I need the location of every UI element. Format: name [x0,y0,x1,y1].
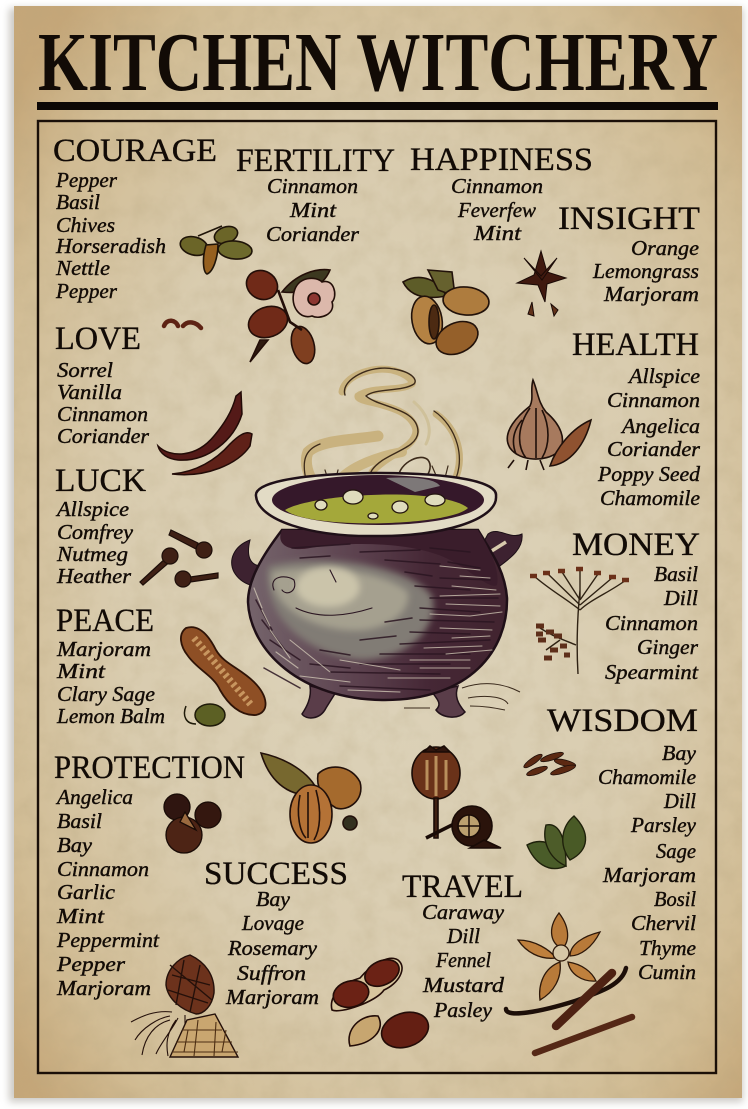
panel: money: Basil [654,562,698,586]
panel: love: Coriander [57,424,150,448]
icon: chillies [158,392,252,475]
title rule [37,102,718,110]
panel: insight: Lemongrass [592,259,699,283]
icon: cauldron steam [304,368,459,490]
icon: poppy seed heads [412,746,501,848]
panel: love: LOVE [55,321,141,357]
panel: protection: Peppermint [56,928,160,952]
panel: wisdom: Chamomile [598,765,696,789]
panel: happiness [410,142,593,245]
panel: travel [402,869,523,1022]
panel: insight: INSIGHT [558,201,700,237]
panel: courage: Horseradish [55,234,166,258]
panel: peace: Marjoram [56,637,151,661]
panel: insight [558,201,700,306]
panel: peace [56,603,165,728]
panel: health: HEALTH [572,327,699,363]
panel: health: Angelica [620,414,700,438]
panel: courage: Basil [56,190,100,214]
panel: travel: TRAVEL [402,869,523,905]
panel: luck: Heather [56,564,132,588]
panel: health: Allspice [627,364,700,388]
icon: cauldron feet [302,686,465,718]
panel: luck: Allspice [55,497,129,521]
icon: dill umbel [530,569,629,674]
cauldron scribble by right foot [404,684,520,710]
panel: money: Dill [663,586,698,610]
panel: travel: Mustard [422,973,505,997]
panel: health: Coriander [607,437,701,461]
panel: protection: Angelica [55,785,133,809]
icon: small beans [164,321,201,328]
panel: luck [55,463,146,588]
cauldron highlight [267,560,433,660]
icon: pine cone and nuts [131,955,238,1057]
panel: insight: Orange [631,236,699,260]
panel: protection: Marjoram [56,976,151,1000]
panel: health: Poppy Seed [597,462,701,486]
panel: courage: Pepper [55,168,118,192]
icon: caraway seeds [522,750,576,778]
panel: wisdom: Marjoram [602,863,696,887]
icon: cloves [140,530,218,587]
cauldron neck shadow [280,530,498,586]
panel: health [572,327,701,510]
panel: happiness: HAPPINESS [410,142,593,178]
panel: money [572,527,700,684]
panel: protection: Basil [57,809,102,833]
panel: wisdom: Sage [656,839,696,863]
panel: success: SUCCESS [204,856,348,892]
panel: fertility [236,143,395,246]
panel: protection: Cinnamon [57,857,149,881]
panel: success: Marjoram [225,985,319,1009]
panel: health: Cinnamon [607,388,700,412]
cauldron rim [256,473,496,536]
panel: luck: Comfrey [57,520,134,544]
panel: travel: Dill [446,924,480,948]
panel: courage: Pepper [55,279,118,303]
panel: love: Cinnamon [57,402,148,426]
panel: fertility: Mint [289,198,337,222]
panel: success: Suffron [237,961,306,985]
icon: garlic [507,380,591,470]
icon: moth seed pods [178,223,253,274]
panel: love [55,321,150,448]
panel: money: Spearmint [605,660,699,684]
panel: health: Chamomile [600,486,700,510]
icon: cauldron handles [232,531,522,587]
panel: wisdom: Dill [663,789,696,813]
panel: courage: COURAGE [53,133,217,169]
icon: hazelnuts [164,794,221,853]
icon: pistachio nuts [403,270,490,361]
panel: courage: Nettle [55,256,110,280]
cauldron hatching [254,544,502,692]
panel: fertility: FERTILITY [236,143,395,179]
panel: money: Cinnamon [605,611,698,635]
panel: wisdom [547,703,698,984]
panel: peace: PEACE [56,603,154,639]
panel: peace: Mint [56,659,106,683]
panel: wisdom: Thyme [639,936,696,960]
panel: money: Ginger [637,635,699,659]
panel: success: Lovage [241,911,304,935]
panel: travel: Pasley [433,998,493,1022]
icon: lemon balm olive [184,704,225,726]
panel: protection: Bay [57,833,93,857]
panel: luck: LUCK [55,463,146,499]
icon: star anise [517,251,566,316]
panel: protection: PROTECTION [54,750,245,786]
icon: vanilla pod and cinnamon sticks [506,968,632,1053]
panel: success [204,856,348,1009]
icon: cauldron [232,368,522,718]
panel: protection: Garlic [57,880,116,904]
panel: wisdom: Bay [662,741,697,765]
panel: happiness: Cinnamon [451,174,543,198]
panel: money: MONEY [572,527,700,563]
icon: nutmeg [261,753,361,843]
panel: protection: Pepper [56,952,126,976]
panel: love: Vanilla [57,380,122,404]
panel: courage [53,133,217,303]
panel: happiness: Feverfew [457,198,536,222]
icon: rosehips and flower [241,265,335,366]
panel: wisdom: Chervil [631,911,696,935]
panel: success: Rosemary [227,936,318,960]
panel: travel: Caraway [422,900,505,924]
panel: happiness: Mint [473,221,522,245]
icon: sage leaves [527,816,586,869]
panel: luck: Nutmeg [56,542,128,566]
icon: peanut halves [330,955,433,1054]
panel: fertility: Cinnamon [267,174,358,198]
panel: peace: Clary Sage [57,682,155,706]
panel: success: Bay [256,887,291,911]
cauldron soup [285,495,468,523]
panel: travel: Fennel [435,948,491,972]
panel: insight: Marjoram [603,282,699,306]
panel: protection [54,750,245,1000]
cauldron body [248,530,507,700]
icon: peanut [181,627,266,715]
panel: wisdom: WISDOM [547,703,698,739]
panel: peace: Lemon Balm [56,704,165,728]
frame [38,121,716,1073]
panel: courage: Chives [56,213,115,237]
panel: wisdom: Parsley [630,813,697,837]
panel: love: Sorrel [57,358,113,382]
icon: vanilla flower [518,913,600,1000]
panel: wisdom: Cumin [638,960,696,984]
panel: protection: Mint [56,904,105,928]
panel: fertility: Coriander [266,222,360,246]
panel: wisdom: Bosil [654,887,696,911]
